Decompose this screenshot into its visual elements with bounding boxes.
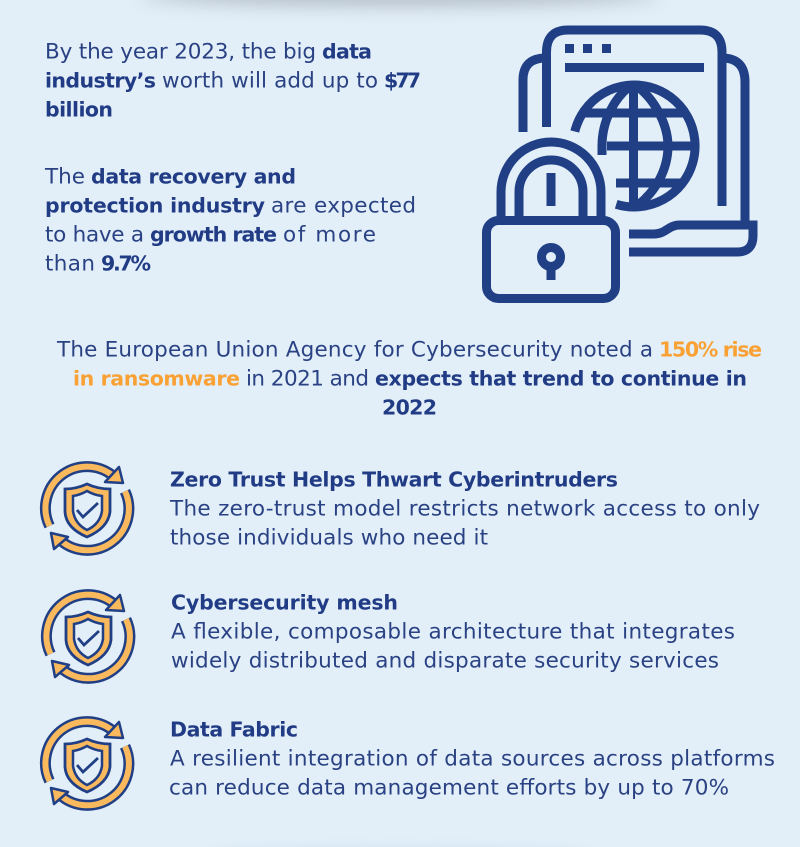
heading and text: cybersecurity mesh: A flexible, composable architecture that integrates <box>171 620 735 644</box>
heading and text: data fabric: can reduce data management efforts by up to 70% <box>169 776 729 800</box>
text block: data recovery growth rate: growth rate <box>150 222 277 246</box>
text block: big data industry worth <box>45 40 421 122</box>
text block: data recovery growth rate <box>44 164 416 276</box>
laptop back left <box>523 58 546 132</box>
icon: shield with cycle arrows 2 <box>46 595 130 678</box>
laptop screen <box>546 30 722 206</box>
text block: big data industry worth: $77 <box>384 68 421 92</box>
icon: shield with cycle arrows 1 <box>45 467 129 550</box>
text block: big data industry worth: billion <box>45 98 113 122</box>
text block: data recovery growth rate: protection industry <box>45 194 265 218</box>
heading and text: data fabric: A resilient integration of data sources across platforms <box>170 746 775 772</box>
text block: big data industry worth: worth will add up to <box>162 68 378 94</box>
callout: ransomware statistic: The European Union Agency for Cybersecurity noted a <box>56 338 653 362</box>
bottom shadow <box>210 846 590 847</box>
callout: ransomware statistic <box>56 338 762 420</box>
heading and text: data fabric <box>169 718 775 800</box>
icon: shield with cycle arrows 3 <box>45 722 129 805</box>
callout: ransomware statistic: in 2021 and <box>246 366 369 392</box>
heading and text: cybersecurity mesh: widely distributed and disparate security services <box>171 648 719 674</box>
text block: big data industry worth: industry’s <box>45 68 156 92</box>
callout: ransomware statistic: 150% rise <box>659 338 762 362</box>
text block: data recovery growth rate: The <box>44 164 85 190</box>
text block: data recovery growth rate: than <box>45 252 95 276</box>
text block: big data industry worth: By the year 2023, the big <box>45 40 316 64</box>
heading and text: zero trust <box>169 468 760 550</box>
callout: ransomware statistic: in ransomware <box>73 366 240 390</box>
callout: ransomware statistic: expects that trend to continue in <box>375 366 747 390</box>
heading and text: zero trust: those individuals who need it <box>170 526 488 550</box>
text block: data recovery growth rate: to have a <box>45 222 144 248</box>
text block: data recovery growth rate: 9.7% <box>101 252 151 276</box>
text block: big data industry worth: data <box>322 40 372 64</box>
heading and text: data fabric: Data Fabric <box>170 718 298 742</box>
laptop back right <box>722 58 745 222</box>
text block: data recovery growth rate: data recovery and <box>91 164 296 188</box>
callout: ransomware statistic: 2022 <box>382 396 437 420</box>
laptop base <box>629 225 753 252</box>
text block: data recovery growth rate: of more <box>283 222 376 248</box>
text block: data recovery growth rate: are expected <box>271 194 416 218</box>
heading and text: zero trust: Zero Trust Helps Thwart Cyberintruders <box>170 468 618 492</box>
padlock <box>486 142 616 298</box>
icon: laptop with globe and padlock <box>486 30 753 298</box>
browser toolbar <box>565 44 704 72</box>
top shadow <box>140 0 660 6</box>
heading and text: cybersecurity mesh <box>171 590 735 674</box>
heading and text: zero trust: The zero-trust model restricts network access to only <box>169 496 760 522</box>
globe <box>575 85 695 207</box>
heading and text: cybersecurity mesh: Cybersecurity mesh <box>171 590 398 614</box>
